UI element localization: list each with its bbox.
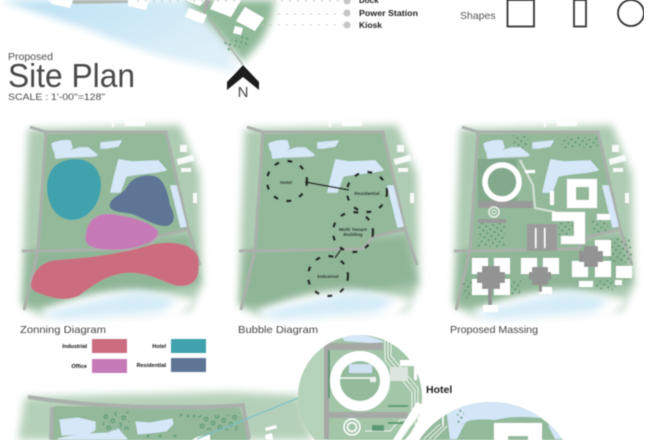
- panel: bubble diagram: [239, 120, 419, 321]
- legend leader lines: [137, 1, 343, 25]
- legend: site facilities: Kiosk: [359, 21, 383, 30]
- callout: hotel detail circle: [298, 330, 425, 440]
- caption: bubble: Bubble Diagram: [238, 324, 318, 336]
- hotel ring: [335, 356, 385, 406]
- plazas: [477, 246, 603, 305]
- legend: zones: [62, 339, 206, 373]
- panel: proposed massing: [454, 120, 634, 321]
- callout line: hotel: [197, 398, 298, 439]
- zone: office: [85, 214, 158, 250]
- label: hotel: Hotel: [426, 384, 452, 396]
- shapes key: Shapes: [460, 10, 496, 22]
- massing: square courtyard block: [567, 179, 597, 208]
- title: SCALE : 1'-00"=128": [8, 92, 105, 103]
- panel: enlarged site plan strip: [18, 392, 312, 440]
- panel: bubble diagram: Multi Tenant: [339, 227, 367, 233]
- top site plan fragment: [0, 0, 275, 72]
- legend: zones: Hotel: [152, 344, 166, 350]
- zone: hotel: [47, 159, 101, 220]
- icon: north arrow: [227, 65, 259, 101]
- legend: zones: Office: [71, 364, 87, 370]
- massing: hotel ring: [485, 165, 519, 199]
- panel: bubble diagram: Hotel: [280, 180, 292, 186]
- legend: zones: Residential: [137, 363, 166, 369]
- legend: site facilities: Power Station: [359, 9, 418, 18]
- icon: north arrow: N: [238, 84, 248, 101]
- caption: massing: Proposed Massing: [450, 324, 538, 336]
- zone: residential: [110, 175, 174, 226]
- parking: [527, 224, 557, 251]
- title: [8, 51, 135, 103]
- callout: residential detail circle: [419, 402, 563, 440]
- massing: multi tenant C block: [552, 212, 585, 244]
- panel: zoning diagram: [22, 120, 202, 321]
- caption: zoning: Zonning Diagram: [20, 324, 106, 336]
- shapes key: [460, 0, 644, 26]
- panel: bubble diagram: Residential: [354, 191, 380, 197]
- title: Proposed: [8, 51, 53, 63]
- legend: site facilities: [344, 0, 418, 30]
- title: Site Plan: [8, 57, 135, 94]
- panel: bubble diagram: Building: [343, 232, 363, 238]
- massing: white residential blocks: [472, 170, 632, 312]
- legend: zones: Industrial: [62, 344, 87, 350]
- panel: bubble diagram: Industrial: [317, 274, 339, 280]
- connector band: [393, 402, 425, 440]
- zone: industrial: [31, 243, 199, 299]
